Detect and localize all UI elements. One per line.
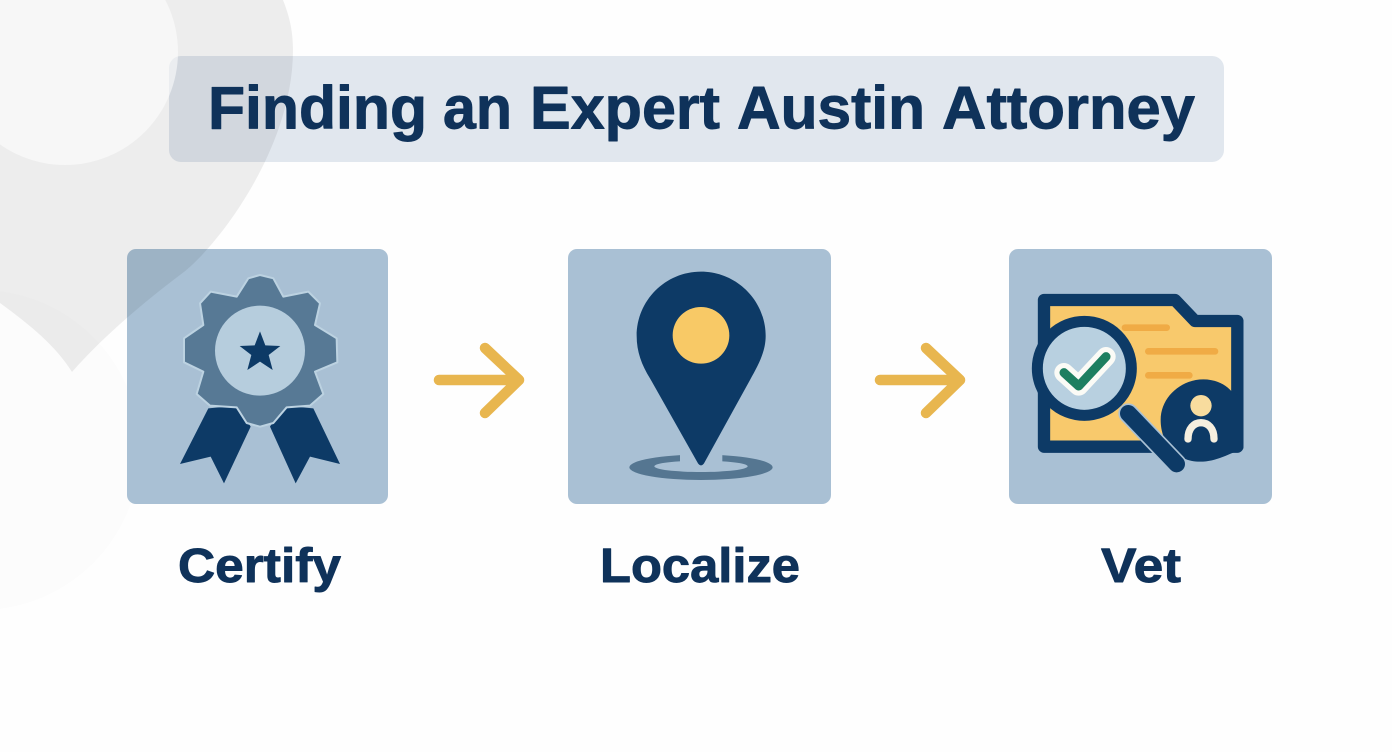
title: Austin	[737, 74, 925, 142]
icon: map pin	[629, 272, 773, 480]
background watermark: location pin	[0, 0, 293, 372]
title: Expert	[530, 74, 720, 142]
panel: vet card	[1009, 249, 1272, 504]
label: Localize: Localize	[600, 540, 800, 593]
panel: localize card	[568, 249, 831, 504]
label: Vet: Vet	[1101, 540, 1181, 593]
icon: folder with magnifier and person	[1037, 300, 1243, 464]
icon: certification badge	[180, 275, 340, 483]
title: Attorney	[942, 74, 1196, 142]
title: Finding	[208, 74, 427, 142]
panel: title banner	[169, 56, 1224, 162]
arrow: localize to vet	[880, 348, 960, 413]
arrow: certify to localize	[439, 348, 519, 413]
label: Certify: Certify	[178, 540, 341, 593]
panel: certify card	[127, 249, 388, 504]
title: an	[443, 74, 512, 142]
